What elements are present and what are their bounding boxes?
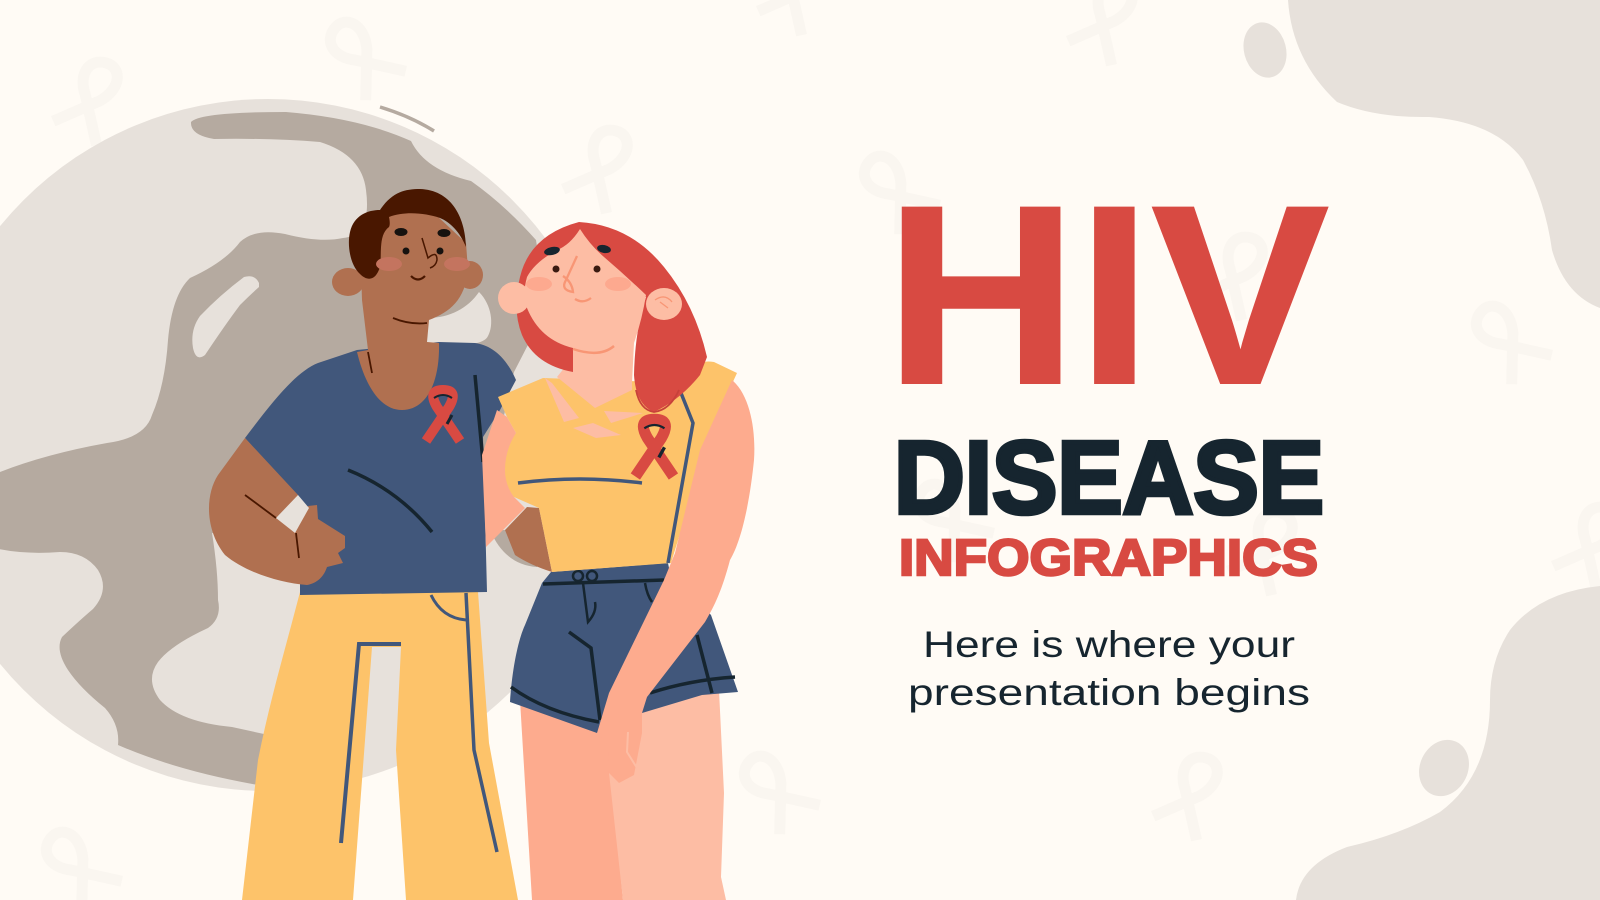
globe highlight (192, 276, 259, 357)
woman: hair (516, 222, 707, 412)
woman: shorts (510, 563, 738, 733)
woman: hair strand (636, 390, 679, 412)
man: head and neck (357, 200, 468, 410)
heading: INFOGRAPHICS: INFOGRAPHICS (899, 529, 1318, 586)
man: wrist band (276, 495, 309, 533)
icon: red ribbon on man (426, 390, 460, 441)
man (209, 189, 552, 900)
title: HIV: HIV (885, 153, 1329, 438)
woman: right arm (597, 380, 754, 783)
man: trousers (242, 592, 518, 900)
woman: neckline skin (545, 357, 643, 438)
woman: top seams (518, 388, 693, 563)
woman: right leg (609, 690, 726, 900)
woman (482, 222, 754, 900)
woman: left arm (482, 410, 525, 547)
globe illustration (0, 99, 614, 791)
blob: bottom right (1296, 586, 1600, 900)
subtitle (908, 624, 1310, 713)
man: arm lines (245, 495, 299, 558)
man: ears (332, 261, 483, 296)
globe disc (0, 99, 614, 791)
woman: finger lines (627, 732, 637, 768)
woman: face details (526, 244, 672, 353)
man: trouser seams (341, 593, 497, 852)
blob: top right (1288, 0, 1600, 308)
woman: shorts lines (511, 571, 735, 722)
blob: bottom oval (1410, 732, 1478, 804)
light patch behind chin (427, 292, 491, 345)
man: t-shirt (245, 342, 516, 595)
grey blob under arm (490, 530, 545, 567)
blob: top oval (1237, 18, 1293, 82)
woman: left leg (520, 700, 623, 900)
man: back arm (505, 507, 552, 572)
man: shirt lines (348, 375, 483, 532)
man: hair (349, 189, 466, 279)
globe land (0, 112, 545, 786)
man: front arm and hand (209, 438, 345, 585)
orbit arc (380, 107, 434, 131)
woman: yellow top (498, 362, 737, 572)
subtitle: Here is where your (923, 624, 1295, 665)
subtitle: presentation begins (908, 672, 1310, 713)
heading: DISEASE: DISEASE (894, 420, 1324, 535)
icon: red ribbon on woman (635, 419, 673, 476)
man: face details (368, 228, 470, 373)
woman: neck and face (524, 229, 646, 383)
woman: ears (498, 282, 682, 320)
